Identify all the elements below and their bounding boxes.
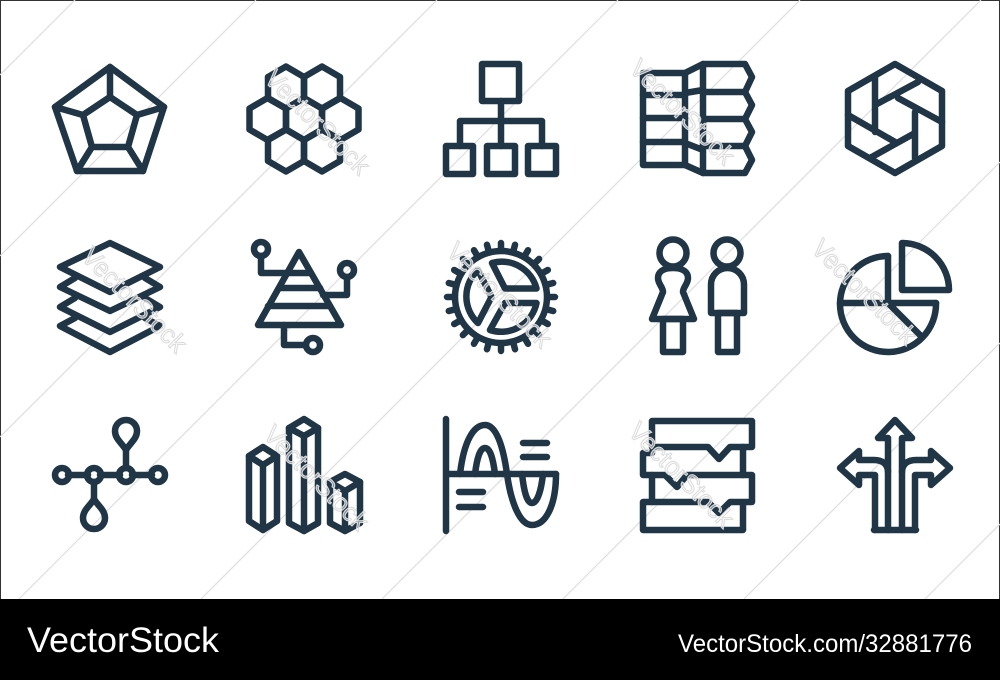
footer logo: VectorStock: [27, 621, 220, 660]
icon: sine wave chart: [446, 419, 556, 531]
watermark text: VectorStock: [441, 236, 559, 354]
icon: honeycomb: [250, 66, 358, 172]
icon: three way arrows: [840, 420, 950, 530]
icon: 3d bar chart: [249, 419, 360, 531]
footer bar: [0, 599, 1000, 680]
icon: folded table: [643, 64, 752, 173]
icon: woman and man: [652, 240, 744, 352]
icon: pie chart: [840, 243, 949, 352]
icon: torn paper stack: [643, 421, 752, 530]
icon: org chart: [446, 64, 556, 174]
footer image id: VectorStock.com/32881776: [678, 630, 972, 658]
watermark text: VectorStock: [76, 241, 194, 359]
icon: gear with pie: [447, 243, 555, 351]
icon: node network: [55, 420, 165, 529]
watermark text: VectorStock: [623, 416, 741, 534]
icon: pentagon radar: [55, 67, 164, 171]
icon: stacked layers: [60, 243, 160, 352]
watermark text: [76, 53, 924, 537]
icon: hexagon aperture: [848, 64, 942, 173]
watermark text: VectorStock: [259, 63, 377, 181]
watermark text: VectorStock: [258, 419, 376, 537]
icon: pyramid with nodes: [254, 242, 354, 352]
watermark text: VectorStock: [806, 233, 924, 351]
watermark text: VectorStock: [624, 53, 742, 171]
